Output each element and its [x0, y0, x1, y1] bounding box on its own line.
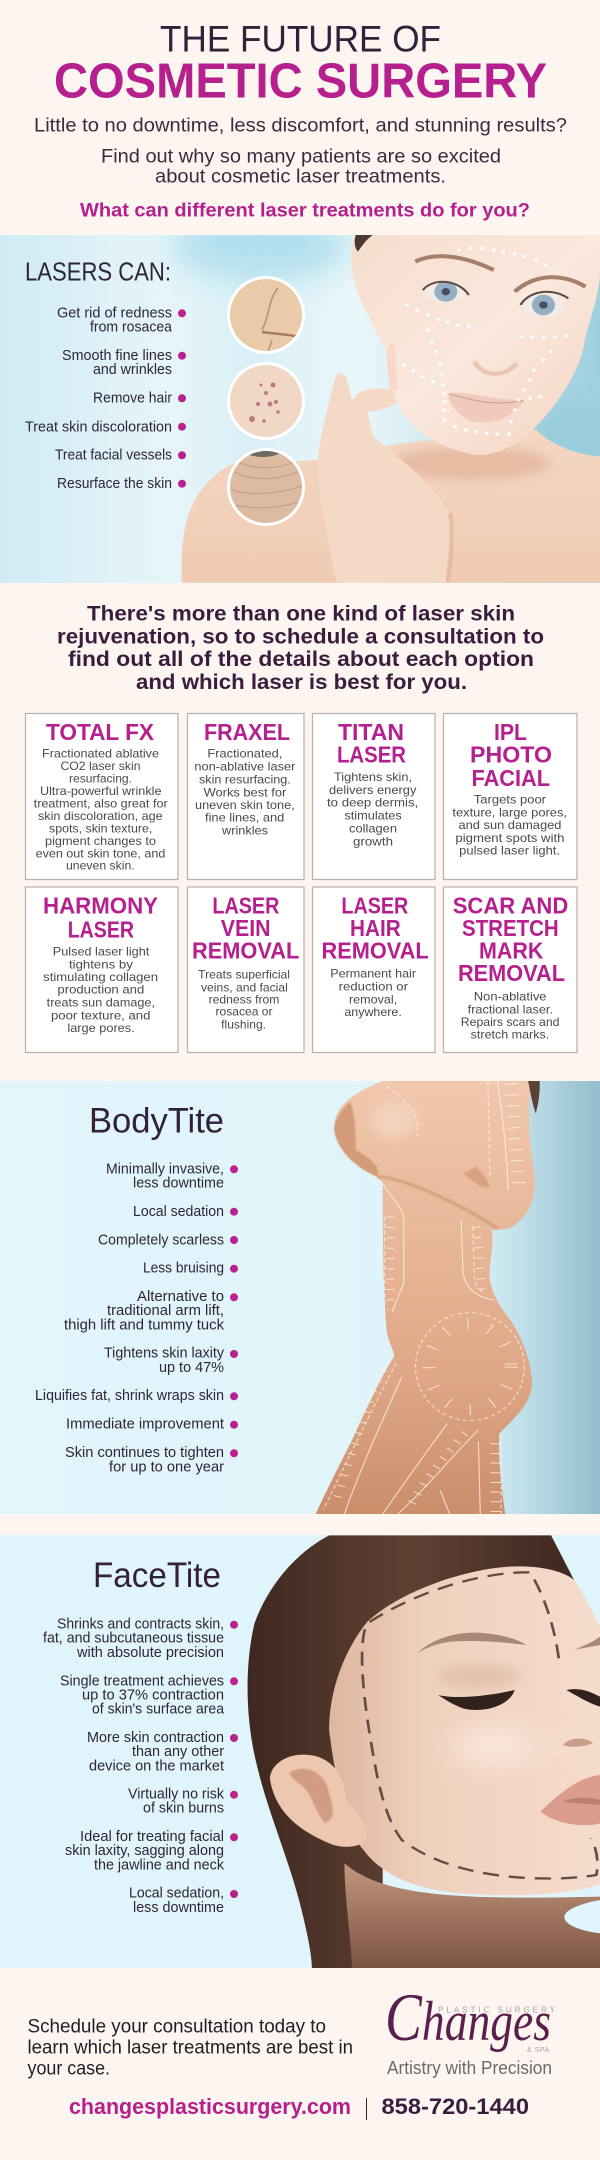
card: Harmony Laser: HARMONY: [43, 892, 158, 918]
card: Harmony Laser: stimulating collagen: [43, 970, 158, 984]
panel: BodyTite: [0, 1081, 600, 1514]
card: Scar and Stretch Mark Removal: MARK: [479, 938, 544, 964]
list: BodyTite: [35, 1161, 238, 1475]
item: single treatment: up to 37% contraction: [82, 1687, 224, 1703]
card: Fraxel: Works best for: [204, 785, 286, 799]
card: Total FX: Ultra-powerful wrinkle: [40, 784, 162, 798]
call to action text: [28, 2016, 353, 2079]
title line two: COSMETIC SURGERY: [54, 54, 547, 108]
card: Laser Hair Removal: LASER: [341, 892, 409, 918]
card: IPL Photo Facial: [444, 714, 577, 880]
item: continues: Skin continues to tighten: [65, 1445, 224, 1461]
item: vessels: Treat facial vessels: [55, 448, 172, 464]
call to action text: learn which laser treatments are best in: [28, 2037, 353, 2058]
logo: Artistry with Precision: [387, 2058, 552, 2078]
item: hair: Remove hair: [93, 391, 172, 407]
card: Total FX: uneven skin.: [66, 858, 135, 872]
item: laxity: up to 47%: [159, 1360, 224, 1376]
item: fine lines: and wrinkles: [93, 362, 172, 378]
item: alternative: thigh lift and tummy tuck: [64, 1317, 225, 1333]
call to action text: Schedule your consultation today to: [28, 2016, 326, 2037]
header: [34, 19, 567, 222]
card: Total FX: skin discoloration, age: [38, 809, 163, 823]
card: Titan Laser: LASER: [337, 742, 406, 768]
section heading: There's more than one kind of laser skin: [87, 603, 515, 626]
item: single treatment: Single treatment achieves: [60, 1673, 224, 1689]
card: IPL Photo Facial: texture, large pores,: [452, 805, 567, 819]
card: IPL Photo Facial: and sun damaged: [458, 818, 561, 832]
contact line: [69, 2094, 529, 2120]
card: Titan Laser: growth: [353, 834, 393, 848]
item: facial laxity: skin laxity, sagging along: [65, 1843, 224, 1859]
card: Laser Vein Removal: REMOVAL: [192, 938, 299, 964]
item: redness: from rosacea: [90, 320, 173, 336]
card: Titan Laser: to deep dermis,: [327, 796, 418, 810]
item: laxity: Tightens skin laxity: [104, 1346, 225, 1362]
item: minimally invasive: less downtime: [133, 1176, 224, 1192]
card: Fraxel: fine lines, and: [205, 811, 284, 825]
card: Fraxel: uneven skin tone,: [195, 798, 295, 812]
card: Total FX: treatment, also great for: [34, 796, 168, 810]
item: resurface: Resurface the skin: [57, 476, 172, 492]
item: no burns: [128, 1787, 238, 1817]
card: Scar and Stretch Mark Removal: stretch marks.: [471, 1028, 549, 1042]
card: Fraxel: Fractionated,: [207, 747, 282, 761]
card: Laser Vein Removal: veins, and facial: [201, 980, 288, 994]
item: redness: Get rid of redness: [57, 305, 172, 321]
item: more contraction: than any other: [132, 1744, 224, 1760]
item: shrinks: [43, 1616, 238, 1661]
item: liquifies fat: Liquifies fat, shrink wraps skin: [35, 1388, 224, 1404]
item: less bruising: Less bruising: [143, 1261, 224, 1277]
card: Laser Vein Removal: flushing.: [221, 1017, 266, 1031]
item: sedation: [129, 1886, 238, 1916]
item: alternative: traditional arm lift,: [107, 1303, 224, 1319]
card: Laser Hair Removal: Permanent hair: [330, 967, 416, 981]
icon: acne circle: [227, 362, 305, 440]
item: fine lines: Smooth fine lines: [62, 348, 172, 364]
card: Laser Vein Removal: VEIN: [221, 915, 271, 941]
magenta question: What can different laser treatments do for you?: [80, 201, 530, 222]
item: no burns: of skin burns: [143, 1801, 224, 1817]
panel: lasers can: [0, 210, 600, 583]
card: Scar and Stretch Mark Removal: Non-ablative: [474, 990, 547, 1004]
card: IPL Photo Facial: FACIAL: [472, 765, 550, 791]
item: alternative: Alternative to: [137, 1289, 224, 1305]
card: Total FX: Fractionated ablative: [42, 747, 159, 761]
card: Fraxel: skin resurfacing.: [199, 772, 291, 786]
card: Total FX: pigment changes to: [45, 834, 156, 848]
card: Titan Laser: collagen: [349, 821, 397, 835]
card: Laser Hair Removal: HAIR: [350, 915, 401, 941]
item: laxity: [104, 1346, 238, 1376]
photo: body with treatment markings: [316, 1081, 540, 1514]
card: Titan Laser: [312, 714, 435, 880]
card: Scar and Stretch Mark Removal: STRETCH: [462, 915, 559, 941]
contact line: 858-720-1440: [382, 2094, 529, 2119]
hero background: [0, 210, 600, 583]
card: Harmony Laser: production and: [57, 983, 144, 997]
card: Titan Laser: Tightens skin,: [334, 770, 412, 784]
card: Harmony Laser: treats sun damage,: [47, 996, 155, 1010]
section heading: [57, 603, 544, 694]
item: no burns: Virtually no risk: [128, 1787, 225, 1803]
card: Titan Laser: delivers energy: [329, 783, 416, 797]
card: Laser Hair Removal: REMOVAL: [322, 938, 429, 964]
card: Titan Laser: stimulates: [344, 809, 402, 823]
list: FaceTite: [43, 1616, 238, 1916]
item: shrinks: with absolute precision: [76, 1645, 224, 1661]
item: shrinks: fat, and subcutaneous tissue: [43, 1631, 224, 1647]
card: Harmony Laser: [26, 887, 178, 1052]
card: Laser Vein Removal: redness from: [209, 992, 279, 1006]
card: Laser Vein Removal: Treats superficial: [198, 968, 290, 982]
card: Laser Vein Removal: [188, 887, 304, 1052]
card: Harmony Laser: poor texture, and: [51, 1008, 150, 1022]
item: redness: [57, 305, 186, 336]
item: continues: [65, 1445, 238, 1475]
card: Fraxel: non-ablative laser: [194, 760, 295, 774]
item: fine lines: [62, 348, 186, 378]
section heading: find out all of the details about each option: [68, 648, 534, 671]
card: Fraxel: [188, 714, 304, 880]
card: Fraxel: wrinkles: [221, 824, 268, 838]
logo: & SPA: [527, 2047, 549, 2054]
BodyTite heading: BodyTite: [89, 1102, 224, 1141]
item: single treatment: of skin's surface area: [92, 1701, 225, 1717]
item: sedation: Local sedation,: [129, 1886, 224, 1902]
icon: crepey skin circle: [227, 440, 305, 526]
section heading: and which laser is best for you.: [136, 671, 467, 694]
FaceTite heading: FaceTite: [93, 1556, 221, 1595]
card: Harmony Laser: LASER: [68, 916, 134, 942]
subtitle: Little to no downtime, less discomfort, and stunning results?: [34, 115, 567, 137]
card: Harmony Laser: Pulsed laser light: [53, 944, 150, 958]
card: Laser Vein Removal: rosacea or: [216, 1005, 272, 1019]
item: sedation: less downtime: [133, 1900, 224, 1916]
lasers can heading: LASERS CAN:: [25, 257, 171, 287]
item: continues: for up to one year: [109, 1459, 224, 1475]
intro text: [101, 146, 501, 188]
item: facial laxity: the jawline and neck: [94, 1857, 225, 1873]
card: IPL Photo Facial: pulsed laser light.: [459, 843, 560, 857]
card: Harmony Laser: large pores.: [67, 1021, 135, 1035]
card: IPL Photo Facial: pigment spots with: [455, 831, 564, 845]
card: Laser Hair Removal: reduction or: [339, 980, 408, 994]
title line one: THE FUTURE OF: [160, 19, 441, 60]
item: single treatment: [60, 1673, 238, 1717]
card: Total FX: TOTAL FX: [46, 719, 155, 745]
contact line: changesplasticsurgery.com: [69, 2094, 351, 2119]
item: facial laxity: [65, 1829, 238, 1873]
card: Laser Vein Removal: LASER: [212, 892, 280, 918]
card: Total FX: spots, skin texture,: [49, 821, 152, 835]
item: facial laxity: Ideal for treating facial: [80, 1829, 224, 1845]
item: shrinks: Shrinks and contracts skin,: [57, 1616, 224, 1632]
icon: wrinkles circle: [227, 276, 305, 354]
card: Laser Hair Removal: removal,: [349, 992, 397, 1006]
card: Fraxel: FRAXEL: [204, 719, 290, 745]
item: minimally invasive: [106, 1161, 238, 1192]
card: IPL Photo Facial: PHOTO: [470, 742, 552, 768]
card: Total FX: resurfacing.: [69, 772, 132, 786]
card: Scar and Stretch Mark Removal: fractional laser.: [468, 1002, 553, 1016]
card: IPL Photo Facial: Targets poor: [474, 792, 546, 806]
item: minimally invasive: Minimally invasive,: [106, 1161, 224, 1177]
section heading: rejuvenation, so to schedule a consultation to: [57, 625, 544, 648]
list: lasers can: [25, 305, 186, 492]
photo: woman's face with laser dots: [182, 235, 600, 583]
item: immediate: Immediate improvement: [66, 1417, 224, 1433]
card: Harmony Laser: tightens by: [69, 957, 133, 971]
card: Total FX: [26, 714, 178, 880]
card: Total FX: CO2 laser skin: [60, 759, 140, 773]
photo: face with dashed treatment outline: [248, 1535, 600, 1968]
item: more contraction: More skin contraction: [87, 1730, 224, 1746]
card: Laser Hair Removal: [312, 887, 435, 1052]
panel: FaceTite: [0, 1535, 600, 1968]
intro text: Find out why so many patients are so excited: [101, 146, 501, 168]
logo: Changes: [385, 1979, 551, 2055]
item: discoloration: Treat skin discoloration: [25, 419, 172, 435]
card: Total FX: even out skin tone, and: [36, 846, 165, 860]
card: Laser Hair Removal: anywhere.: [344, 1005, 402, 1019]
item: alternative: [64, 1289, 238, 1333]
face panel background: [0, 1535, 600, 1968]
call to action text: your case.: [28, 2058, 110, 2079]
card: IPL Photo Facial: IPL: [494, 719, 527, 745]
card: Scar and Stretch Mark Removal: REMOVAL: [458, 960, 565, 986]
body panel background: [0, 1081, 600, 1514]
card: Titan Laser: TITAN: [338, 719, 404, 745]
intro text: about cosmetic laser treatments.: [155, 166, 446, 188]
item: local sedation: Local sedation: [133, 1204, 224, 1220]
item: more contraction: [87, 1730, 238, 1774]
item: more contraction: device on the market: [89, 1758, 224, 1774]
card: Scar and Stretch Mark Removal: SCAR AND: [453, 892, 568, 918]
card: Scar and Stretch Mark Removal: Repairs scars and: [461, 1015, 560, 1029]
item: scarless: Completely scarless: [98, 1232, 224, 1248]
card: Scar and Stretch Mark Removal: [444, 887, 577, 1052]
logo: PLASTIC SURGERY: [438, 2006, 556, 2015]
logo: [385, 1979, 556, 2078]
